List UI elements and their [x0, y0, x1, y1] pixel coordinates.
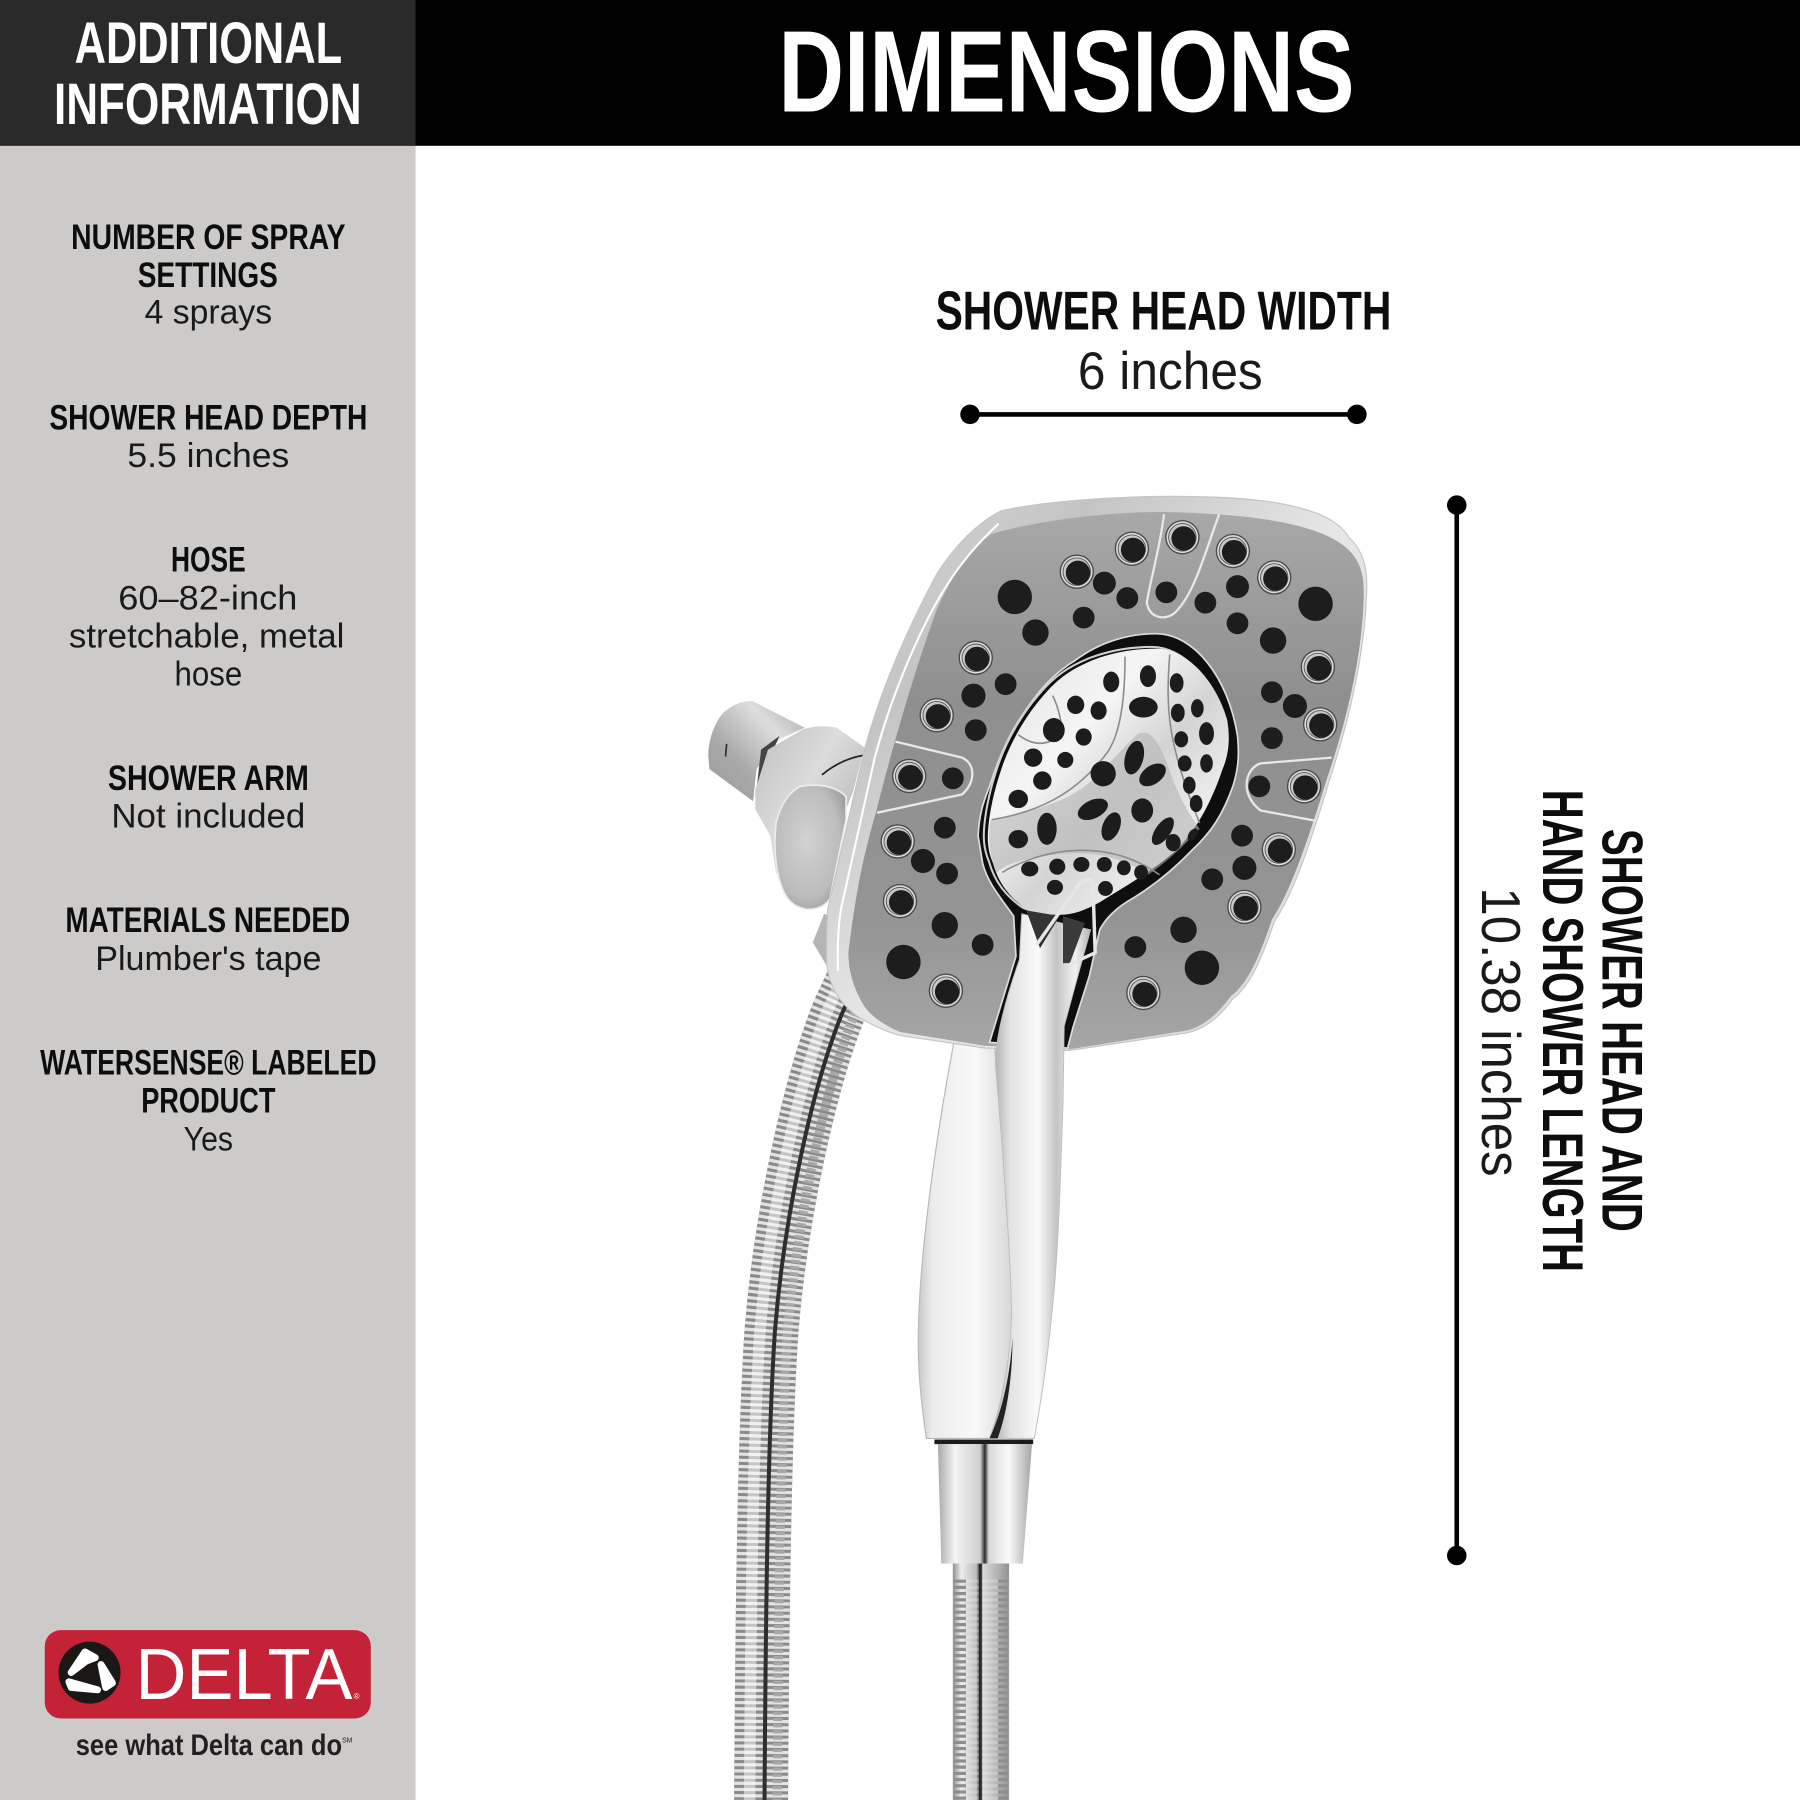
hand shower: silver contours [989, 654, 1200, 875]
text block: shower head depth [49, 397, 367, 475]
wall mount arm connector [708, 701, 864, 971]
sidebar heading [0, 0, 416, 146]
text block: watersense: Yes [184, 1120, 233, 1158]
logo: Delta: ® [354, 1692, 360, 1701]
head: ringed nozzles [880, 520, 1337, 1010]
length dimension line [1447, 495, 1467, 1565]
head: black nozzles [886, 572, 1333, 985]
width label [936, 279, 1391, 401]
head: light tab outlines [877, 514, 1332, 821]
hand shower: trigger clip [1026, 880, 1095, 964]
text block: shower arm: Not included [111, 798, 305, 836]
hand shower: chrome inner ring [984, 647, 1225, 913]
text block: hose: stretchable, metal [69, 617, 344, 655]
width dimension line [960, 405, 1367, 424]
text block: hose: 60–82-inch [118, 580, 297, 618]
text block: materials needed: Plumber's tape [95, 940, 321, 978]
header bar [0, 0, 1800, 146]
title: DIMENSIONS [778, 6, 1355, 136]
logo: Delta: DELTA [135, 1635, 353, 1715]
text block: watersense: PRODUCT [141, 1080, 276, 1120]
head: rim highlight line [838, 523, 999, 971]
product: shower head and hand shower [708, 496, 1367, 1800]
text block: number of spray settings: 4 sprays [145, 294, 272, 332]
text block: hose: HOSE [171, 540, 246, 580]
hand shower: hose collar [938, 1444, 1032, 1564]
text block: watersense: WATERSENSE® LABELED [40, 1042, 377, 1082]
text block: number of spray settings: NUMBER OF SPRAY [71, 217, 346, 257]
head: chrome rim [827, 496, 1367, 1050]
length label: 10.38 inches [1470, 887, 1532, 1177]
hand shower: o-ring [934, 1440, 1033, 1444]
text block: hose [69, 540, 344, 693]
text block: watersense [40, 1042, 377, 1158]
text block: shower head depth: SHOWER HEAD DEPTH [49, 397, 367, 437]
hand shower: spray nozzles [1008, 665, 1214, 896]
hose: left curve [750, 959, 877, 1800]
text block: hose: hose [174, 655, 242, 693]
hand shower: chrome spray disc [988, 649, 1229, 915]
text block: shower arm: SHOWER ARM [108, 758, 309, 798]
length label: HAND SHOWER LENGTH [1530, 790, 1594, 1272]
panel: sidebar background [0, 146, 416, 1800]
text block: materials needed [65, 900, 350, 978]
hand shower: dark crease [990, 1337, 1012, 1438]
hand shower: dark slot outline [978, 634, 1238, 1048]
text block: number of spray settings [71, 217, 346, 332]
hand shower: left body [918, 1033, 1013, 1438]
sidebar heading: INFORMATION [54, 72, 362, 137]
length label: SHOWER HEAD AND [1590, 829, 1654, 1232]
logo: Delta: see what Delta can do [76, 1729, 342, 1762]
width label: SHOWER HEAD WIDTH [936, 279, 1391, 341]
head: spray face [848, 512, 1364, 1049]
length label [1470, 790, 1654, 1272]
text block: shower head depth: 5.5 inches [127, 437, 289, 475]
logo: Delta [45, 1630, 371, 1762]
hose: lower center [953, 1564, 1009, 1800]
width label: 6 inches [1078, 342, 1263, 401]
hand shower: right body and neck [990, 914, 1091, 1438]
sidebar heading: ADDITIONAL [75, 11, 342, 76]
logo: Delta: SM [342, 1738, 353, 1745]
text block: shower arm [108, 758, 309, 836]
text block: materials needed: MATERIALS NEEDED [65, 900, 350, 940]
text block: number of spray settings: SETTINGS [138, 255, 278, 295]
